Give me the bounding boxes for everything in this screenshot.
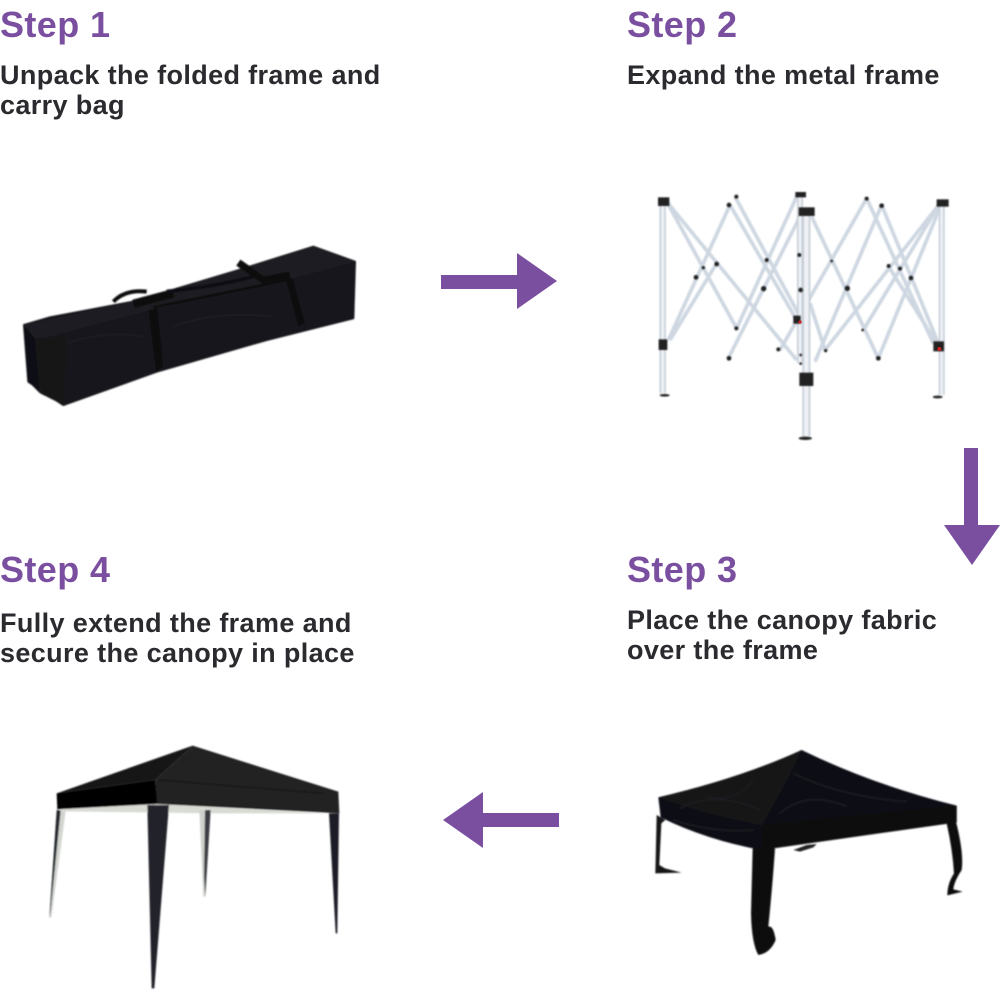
text: step 3 instructions: Place the canopy fabric xyxy=(627,605,937,635)
icon: fully extended canopy xyxy=(49,746,339,988)
left leg xyxy=(49,810,66,918)
text: step 3 instructions xyxy=(627,605,937,665)
icon: canopy fabric over frame xyxy=(655,750,963,955)
icon: expanded metal frame xyxy=(658,192,949,440)
icon: carry bag xyxy=(24,247,355,405)
heading: step 2: Step 2 xyxy=(627,4,737,45)
front leg xyxy=(751,848,776,955)
canopy underside xyxy=(58,804,328,813)
heading: step 1: Step 1 xyxy=(0,4,110,45)
text: step 1 instructions: carry bag xyxy=(0,90,125,120)
frame joints xyxy=(658,192,949,440)
back leg xyxy=(199,810,211,897)
text: step 2 instructions: Expand the metal frame xyxy=(627,60,940,90)
heading: step 3: Step 3 xyxy=(627,549,737,590)
text: step 1 instructions: Unpack the folded frame and xyxy=(0,60,381,90)
arrow: step 2 to step 3 xyxy=(944,448,1000,565)
arrow: step 3 to step 4 xyxy=(443,792,559,848)
canopy roof xyxy=(658,750,957,850)
text: step 3 instructions: over the frame xyxy=(627,635,818,665)
right strap xyxy=(947,822,963,895)
canopy roof xyxy=(155,746,339,813)
text: step 4 instructions: Fully extend the frame and xyxy=(0,608,352,638)
text: step 4 instructions: secure the canopy in place xyxy=(0,638,355,668)
heading: step 4: Step 4 xyxy=(0,549,110,590)
front leg xyxy=(147,805,169,988)
text: step 4 instructions xyxy=(0,608,355,668)
middle strap xyxy=(793,844,817,852)
arrow: step 1 to step 2 xyxy=(441,253,557,309)
text: step 1 instructions xyxy=(0,60,381,120)
left strap xyxy=(655,815,682,873)
right leg xyxy=(329,813,339,933)
